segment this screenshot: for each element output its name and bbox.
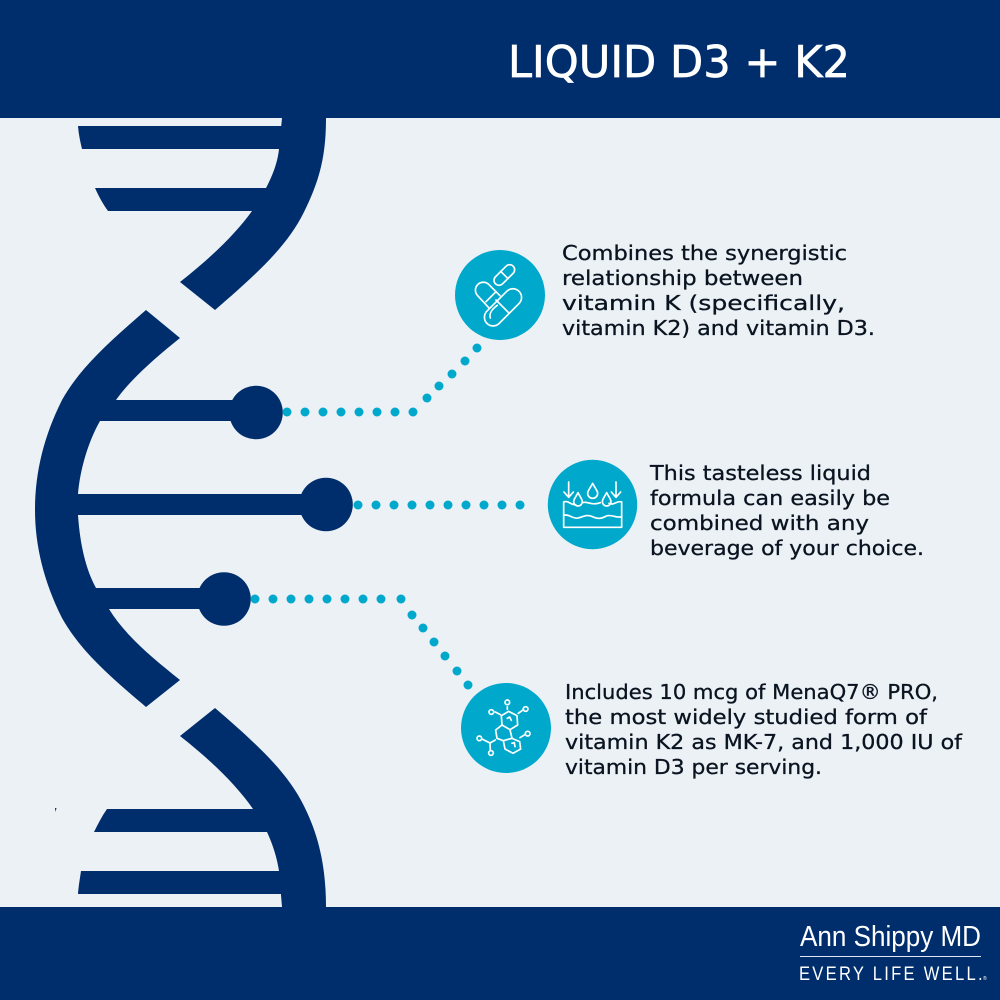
icon: pills [455, 250, 545, 340]
header band [0, 0, 1000, 118]
icon: water and droplets [548, 460, 637, 549]
footer band [0, 907, 1000, 1000]
text block 3: vitamin K2 as MK-7, and 1,000 IU of [565, 730, 963, 754]
node 2 [299, 478, 353, 531]
logo: Ann Shippy MD [800, 921, 981, 953]
middle strand with rungs [35, 310, 310, 707]
text block 3: the most widely studied form of [565, 705, 928, 729]
DNA helix illustration [35, 118, 353, 907]
text block 2: beverage of your choice. [650, 536, 924, 560]
logo: EVERY LIFE WELL. [799, 963, 983, 984]
text block 1: vitamin K2) and vitamin D3. [562, 316, 875, 340]
title: LIQUID D3 + K2 [508, 37, 850, 88]
upper strand with rungs [78, 118, 326, 310]
text block 3: vitamin D3 per serving. [565, 755, 822, 779]
logo: ® [983, 975, 987, 982]
text block 1 [562, 241, 875, 340]
dotted connector 3 [250, 594, 472, 690]
node 1 [229, 386, 283, 439]
text block 1: vitamin K (specifically, [562, 291, 845, 315]
dotted connector 1 [282, 344, 482, 416]
node 3 [197, 572, 251, 626]
text block 1: relationship between [562, 266, 803, 290]
dotted connector 2 [354, 500, 524, 510]
stray mark [55, 808, 56, 812]
text block 2 [649, 461, 924, 560]
logo [799, 921, 987, 984]
text block 1: Combines the synergistic [562, 241, 847, 265]
text block 3 [565, 680, 963, 779]
icon: molecule [461, 683, 551, 773]
text block 2: combined with any [650, 511, 869, 535]
text block 3: Includes 10 mcg of MenaQ7® PRO, [565, 680, 938, 704]
text block 2: formula can easily be [650, 486, 890, 510]
text block 2: This tasteless liquid [649, 461, 871, 485]
lower strand with rungs [78, 708, 326, 907]
